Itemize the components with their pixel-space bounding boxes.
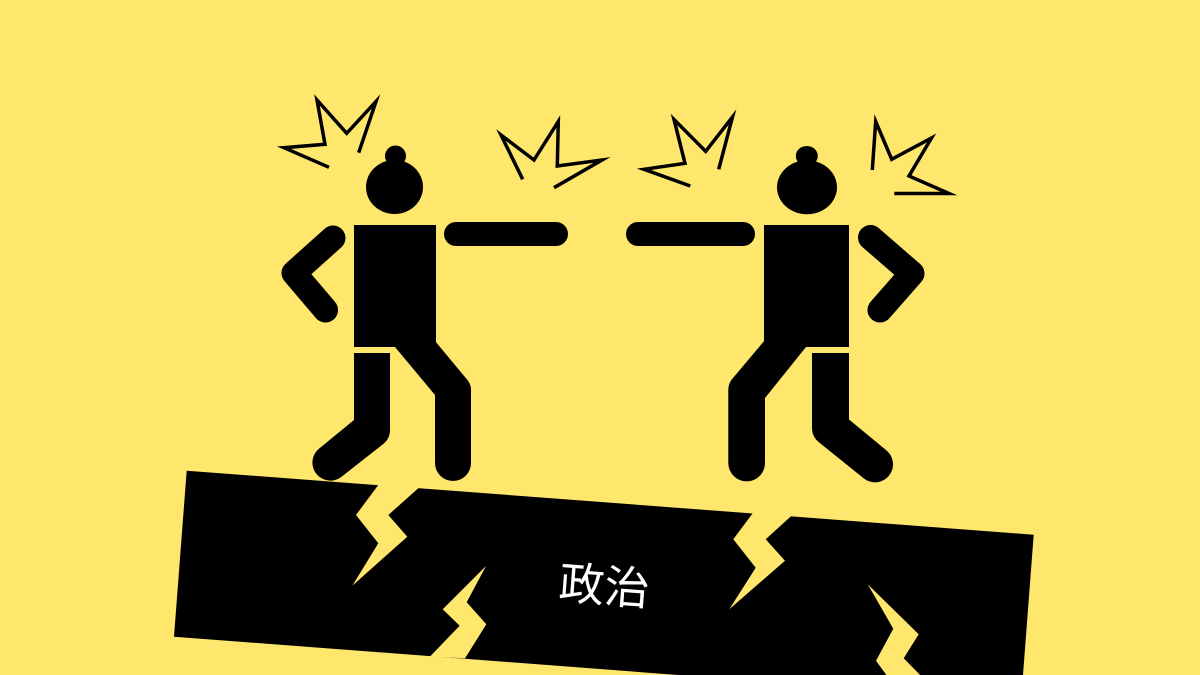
slab label: 政治: [557, 558, 652, 615]
straight leg: [395, 341, 471, 481]
burst: left figure hand: [501, 122, 602, 188]
head: [366, 160, 423, 214]
bent arm: [870, 238, 912, 310]
straight leg: [728, 340, 806, 481]
burst: left figure head: [284, 100, 376, 167]
crack: upper left: [352, 480, 418, 586]
crack: lower left: [430, 566, 486, 658]
crack: lower right: [868, 584, 925, 675]
slab body: [174, 471, 1034, 675]
pointing arm: [444, 222, 568, 246]
head: [777, 160, 837, 214]
hair bun: [385, 146, 406, 166]
burst: right figure hand: [644, 117, 732, 186]
right figure: [626, 146, 912, 482]
torso: [764, 225, 849, 347]
bent leg: [312, 353, 390, 481]
bent arm: [294, 238, 333, 310]
left figure: [294, 146, 568, 481]
burst: right figure head: [872, 122, 949, 194]
cracked slab labelled politics: [174, 471, 1034, 675]
bent leg: [812, 353, 893, 482]
hair bun: [796, 146, 818, 166]
pointing arm: [626, 222, 755, 246]
crack: upper right: [729, 508, 791, 609]
torso: [354, 225, 436, 347]
